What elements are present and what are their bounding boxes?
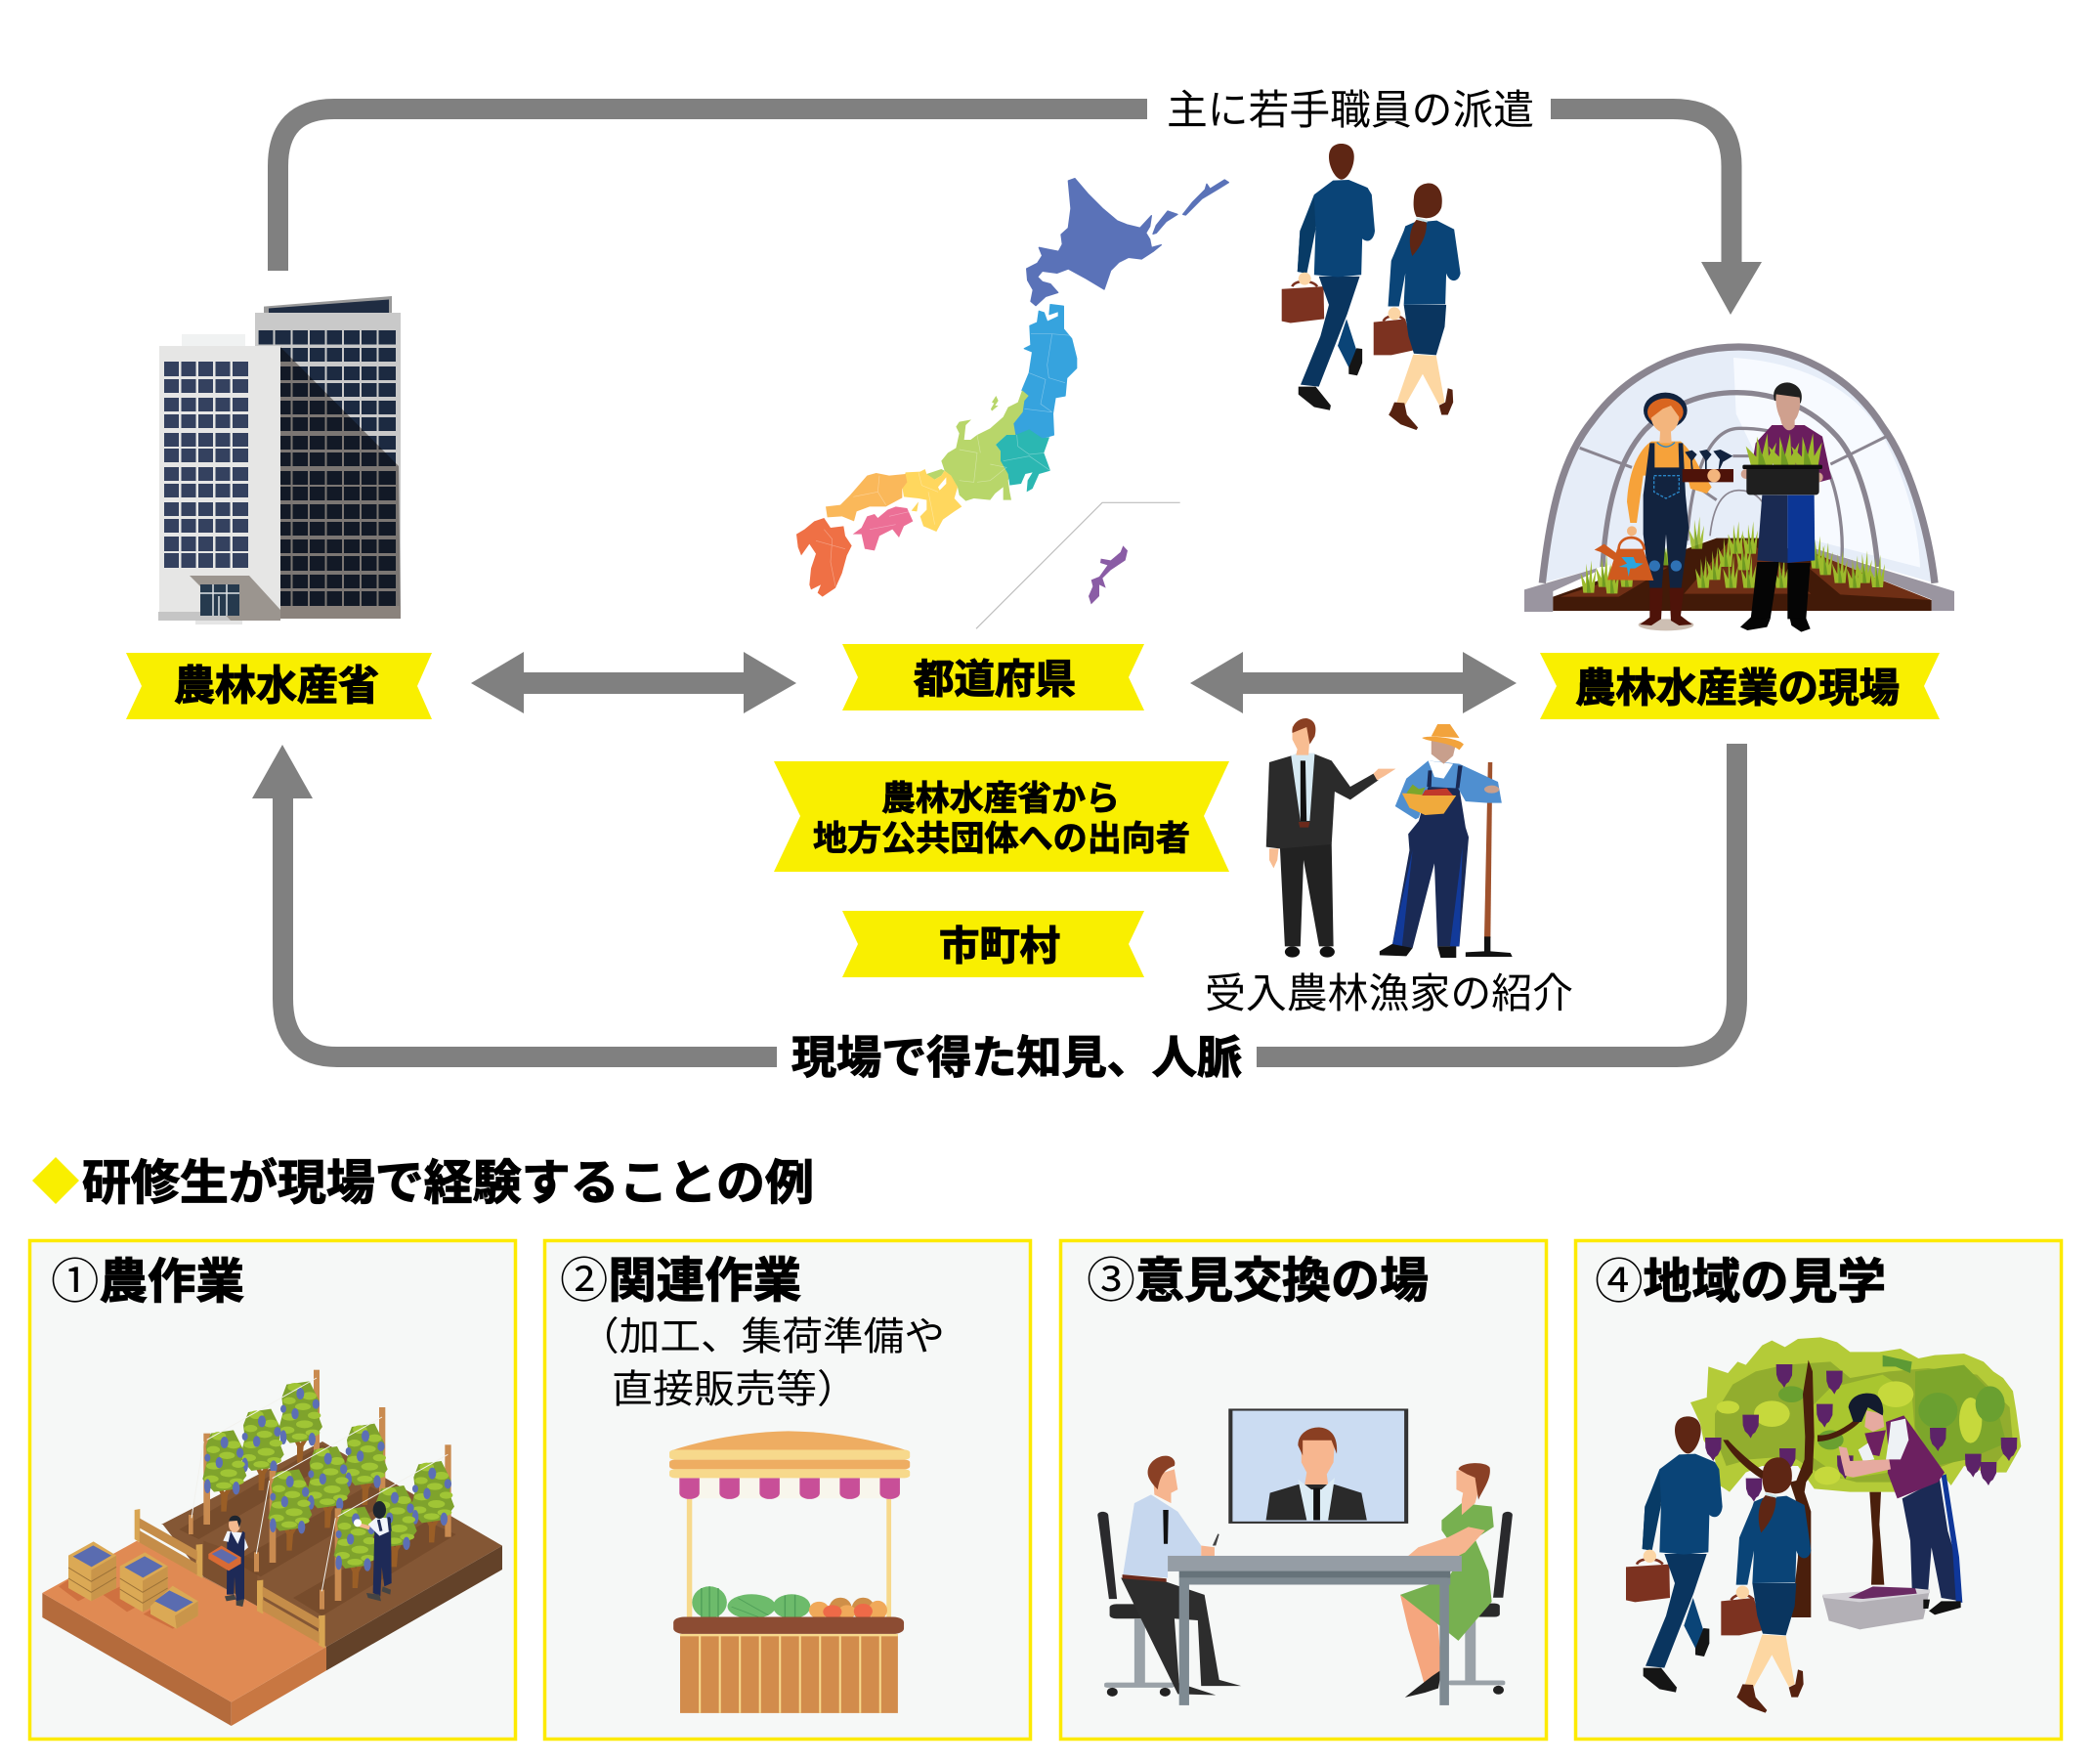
arrow: prefecture to field xyxy=(1190,652,1517,713)
banner: farming field xyxy=(1540,653,1940,719)
arrow: dispatch of young staff (ministry to field) xyxy=(278,109,1762,315)
icon: office building xyxy=(158,296,401,624)
banner: municipality xyxy=(842,911,1144,977)
icon: vineyard tour xyxy=(1626,1337,2021,1713)
icon: greenhouse with two farmers xyxy=(1524,347,1954,632)
arrow: know-how return (field to ministry) xyxy=(252,744,1737,1057)
heading: examples of trainee field experience: 研修生が現場で経験することの例 xyxy=(82,1157,814,1210)
video screen xyxy=(1230,1409,1406,1523)
panel 2: related work xyxy=(545,1241,1030,1740)
icon: businessman and farmer xyxy=(1266,718,1513,958)
grape picker xyxy=(1839,1394,1962,1614)
arrow label: know-how and contacts: 現場で得た知見、人脈 xyxy=(791,1032,1242,1083)
icon: video meeting scene xyxy=(1097,1409,1513,1705)
arrow label: dispatch: 主に若手職員の派遣 xyxy=(1167,87,1534,133)
panel 4: regional tour xyxy=(1575,1241,2062,1740)
banner: prefecture: 都道府県 xyxy=(914,657,1076,702)
walking couple xyxy=(1626,1416,1811,1713)
banner: secondment to local governments: 地方公共団体への出向者 xyxy=(813,820,1190,858)
panel 3 title: ③意見交換の場 xyxy=(1087,1255,1429,1308)
banner: secondment to local governments xyxy=(774,761,1229,872)
label: farmer introduction: 受入農林漁家の紹介 xyxy=(1205,970,1573,1016)
grape tree xyxy=(1690,1337,2021,1617)
panel 1: farm work xyxy=(29,1241,516,1740)
man at table xyxy=(1097,1456,1241,1697)
woman at table xyxy=(1400,1463,1513,1698)
panel 2 subtitle: （加工、集荷準備や xyxy=(578,1315,945,1358)
icon: walking staff couple xyxy=(1282,144,1461,430)
banner: prefecture xyxy=(842,644,1144,710)
banner: Ministry of Agriculture xyxy=(126,653,432,719)
panel 4 title: ④地域の見学 xyxy=(1595,1256,1886,1309)
stacked grape crates xyxy=(68,1541,198,1629)
arrow: ministry to prefecture xyxy=(471,652,796,713)
banner: secondment to local governments: 農林水産省から xyxy=(881,780,1120,818)
icon: isometric vineyard xyxy=(42,1370,502,1726)
icon: produce stall xyxy=(669,1431,910,1713)
panel 2 subtitle xyxy=(578,1315,945,1411)
panel 1 title: ①農作業 xyxy=(51,1256,244,1309)
meeting table xyxy=(1168,1556,1462,1705)
banner: municipality: 市町村 xyxy=(939,924,1060,968)
worker tending vines xyxy=(354,1501,392,1601)
map of Japan xyxy=(796,179,1228,628)
banner: farming field: 農林水産業の現場 xyxy=(1575,666,1900,710)
panel 3: exchange of opinions xyxy=(1061,1241,1546,1740)
panel 2 subtitle: 直接販売等） xyxy=(612,1368,858,1411)
banner: Ministry of Agriculture: 農林水産省 xyxy=(174,663,379,709)
basket of grapes xyxy=(1822,1586,1930,1629)
panel 2 title: ②関連作業 xyxy=(560,1255,801,1308)
worker holding crate xyxy=(208,1516,248,1607)
